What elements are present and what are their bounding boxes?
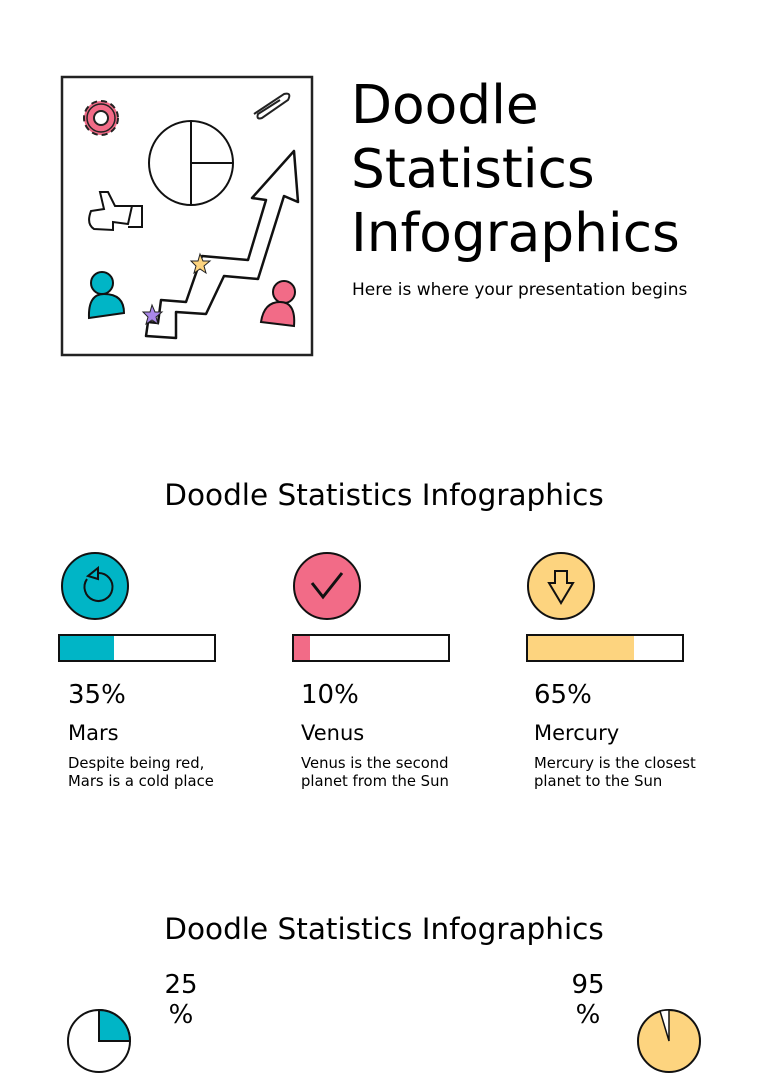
label 95%: 95: [571, 970, 605, 1000]
icon: person teal: [89, 272, 124, 318]
panel: Mars: Mars is a cold place: [68, 773, 214, 790]
panel: Mercury: [526, 552, 696, 790]
illustration panel: [60, 76, 314, 356]
label 25%: 25: [164, 970, 198, 1000]
chart: 25% pie: [67, 1009, 131, 1073]
panel: Mars: 35%: [68, 680, 126, 710]
icon: gear: [84, 101, 118, 135]
icon: teal circle: [61, 552, 129, 620]
icon: rising arrow: [146, 151, 298, 338]
heading 1: Doodle Statistics Infographics: [164, 478, 604, 512]
icon: pie chart: [149, 121, 233, 205]
title: Doodle: [351, 74, 539, 136]
heading 2: Doodle Statistics Infographics: [164, 912, 604, 946]
label 95%: [571, 970, 605, 1030]
icon: person pink: [261, 281, 295, 326]
panel: Venus: Venus is the second: [301, 755, 449, 772]
panel: Mercury: Mercury: [534, 721, 619, 745]
panel: Mercury: Mercury is the closest: [534, 755, 696, 772]
panel: Venus: planet from the Sun: [301, 773, 449, 790]
icon: thumbs up: [89, 192, 142, 230]
title: Statistics: [351, 138, 595, 200]
label 25%: [164, 970, 198, 1030]
icon: pink circle: [293, 552, 361, 620]
label 95%: %: [576, 1000, 600, 1030]
label 25%: %: [169, 1000, 193, 1030]
icon: paperclip: [254, 94, 289, 118]
title: Infographics: [351, 202, 680, 264]
chart: 95% pie: [637, 1009, 701, 1073]
panel: Venus: Venus: [301, 721, 364, 745]
panel: Mercury: 65%: [534, 680, 592, 710]
panel: Mercury: planet to the Sun: [534, 773, 662, 790]
icon: stars: [191, 254, 210, 273]
panel: Venus: [292, 552, 450, 790]
title: [351, 74, 680, 264]
panel: Mars: Mars: [68, 721, 119, 745]
icon: yellow circle: [527, 552, 595, 620]
panel: Mars: [58, 552, 216, 790]
subtitle: Here is where your presentation begins: [352, 280, 687, 300]
panel: Mars: Despite being red,: [68, 755, 204, 772]
panel: Venus: 10%: [301, 680, 359, 710]
